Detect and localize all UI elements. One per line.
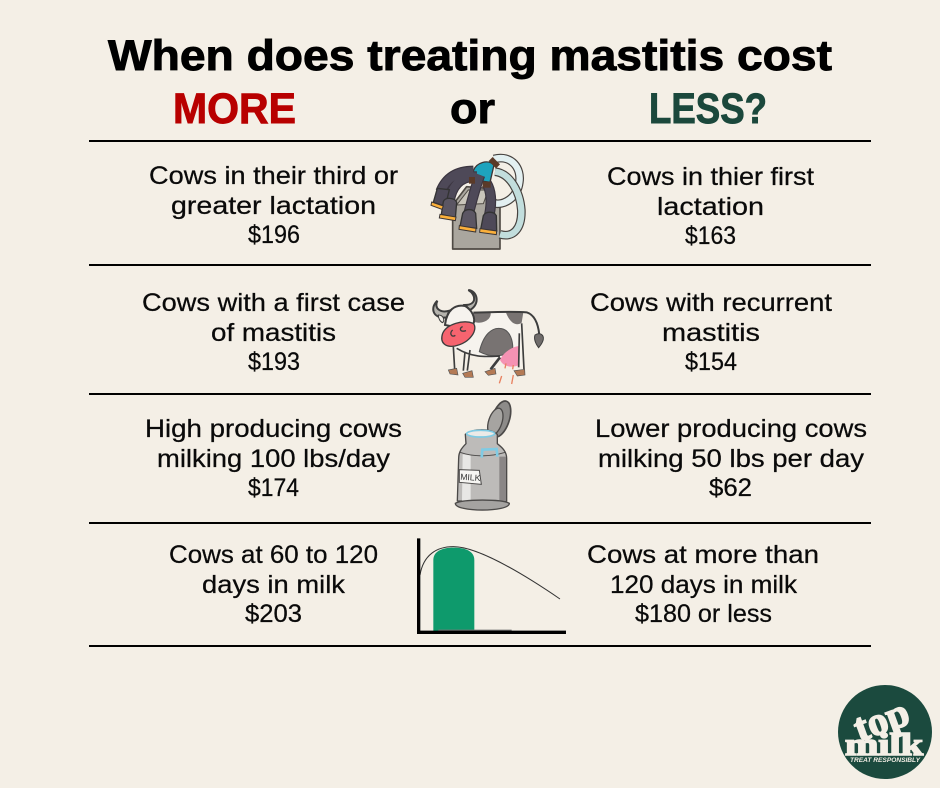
text: row 3 less: milking 50 lbs per day <box>598 445 865 473</box>
heading: or: or <box>450 85 495 133</box>
logo: top milk: milk <box>845 726 923 762</box>
text: row 4 more: Cows at 60 to 120 <box>169 541 378 569</box>
text: row 4 more: days in milk <box>202 571 346 599</box>
text: row 3 more: $174 <box>248 474 299 502</box>
text: row 2 more: Cows with a first case <box>142 289 405 317</box>
icon: milking machine <box>431 158 521 249</box>
text: row 4 less <box>587 541 819 628</box>
text: row 1 more <box>149 162 398 249</box>
logo: top milk: top <box>847 689 915 750</box>
text: row 3 less <box>595 415 867 502</box>
text: row 1 less: $163 <box>685 222 736 250</box>
text: row 2 less <box>590 289 832 376</box>
text: row 2 less: Cows with recurrent <box>590 289 832 317</box>
text: row 1 less <box>607 163 814 250</box>
text: row 3 more: milking 100 lbs/day <box>157 445 391 473</box>
text: row 2 more: $193 <box>248 348 300 376</box>
text: row 4 less: $180 or less <box>635 600 772 628</box>
icon: cow <box>433 290 543 384</box>
text: row 2 more: of mastitis <box>211 319 336 347</box>
text: row 2 less: $154 <box>685 348 737 376</box>
title <box>108 32 832 133</box>
icon: milk can: MILK <box>460 472 481 483</box>
text: row 1 less: Cows in thier first <box>607 163 814 191</box>
icon: milk can <box>455 399 515 510</box>
text: row 4 less: 120 days in milk <box>610 571 798 599</box>
text: row 4 more: $203 <box>245 600 302 628</box>
text: row 1 more: $196 <box>248 221 300 249</box>
text: row 3 less: Lower producing cows <box>595 415 867 443</box>
text: row 3 less: $62 <box>709 474 752 502</box>
logo: top milk: TREAT RESPONSIBLY <box>850 758 921 764</box>
text: row 4 more <box>169 541 378 628</box>
title: When does treating mastitis cost <box>108 32 832 80</box>
text: row 3 more: High producing cows <box>145 415 402 443</box>
text: row 1 more: greater lactation <box>171 192 376 220</box>
heading: less: LESS? <box>649 85 767 133</box>
text: row 4 less: Cows at more than <box>587 541 819 569</box>
text: row 1 more: Cows in their third or <box>149 162 398 190</box>
logo: top milk <box>838 685 932 779</box>
text: row 2 less: mastitis <box>662 319 760 347</box>
text: row 1 less: lactation <box>657 193 764 221</box>
text: row 2 more <box>142 289 405 376</box>
chart: lactation curve <box>419 538 566 632</box>
heading: more: MORE <box>173 85 296 133</box>
text: row 3 more <box>145 415 402 502</box>
